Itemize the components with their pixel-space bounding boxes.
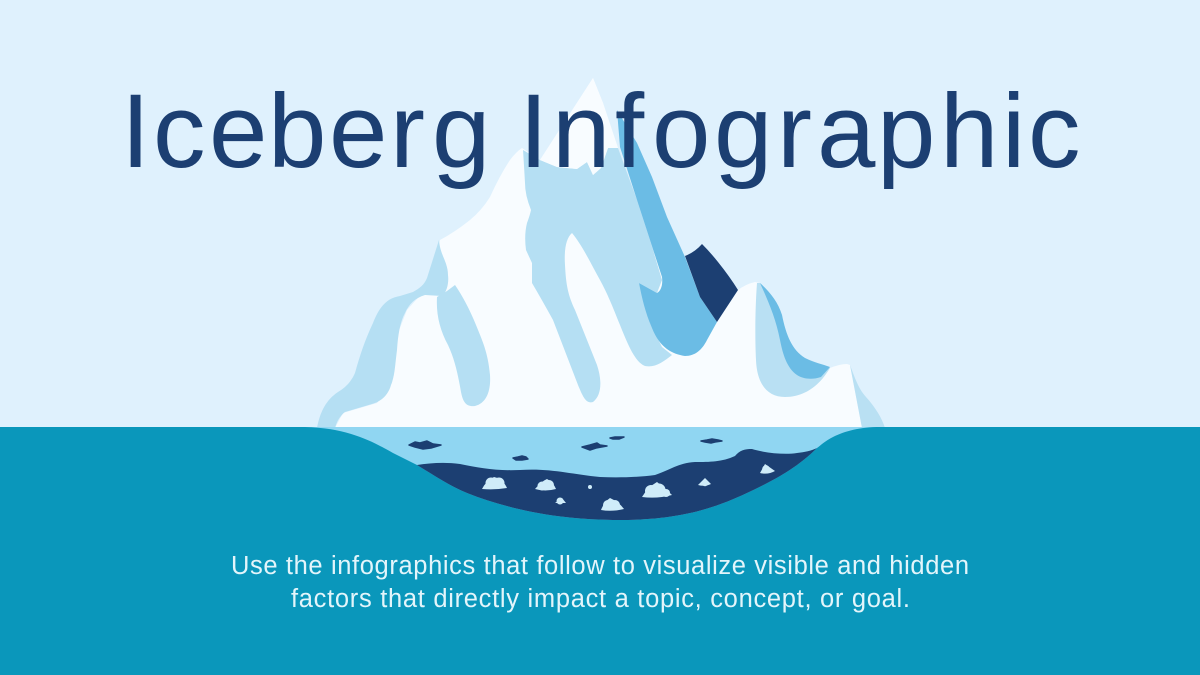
far right light blue slope xyxy=(850,365,885,428)
light blue submerged ice xyxy=(305,427,880,520)
left light blue ridge xyxy=(317,240,448,428)
sea xyxy=(0,427,1200,675)
iceberg above water xyxy=(317,78,885,428)
navy rock xyxy=(685,244,738,322)
second light blue streak xyxy=(437,285,490,406)
white ice chunks xyxy=(482,464,775,511)
sky background xyxy=(0,0,1200,428)
right peak mid blue shadow xyxy=(760,283,830,379)
mid blue shadow face xyxy=(595,80,717,356)
subtitle xyxy=(231,552,969,613)
dark ice floes xyxy=(409,437,722,460)
iceberg white body xyxy=(335,78,862,428)
snow cap xyxy=(540,78,618,175)
subtitle: factors that directly impact a topic, concept, or goal. xyxy=(291,585,910,613)
central light blue face xyxy=(523,148,672,402)
subtitle: Use the infographics that follow to visualize visible and hidden xyxy=(231,552,969,580)
underwater iceberg xyxy=(305,427,880,520)
right peak light blue face xyxy=(755,283,830,397)
title: Iceberg Infographic xyxy=(121,73,1080,190)
navy submerged ice xyxy=(417,448,817,520)
